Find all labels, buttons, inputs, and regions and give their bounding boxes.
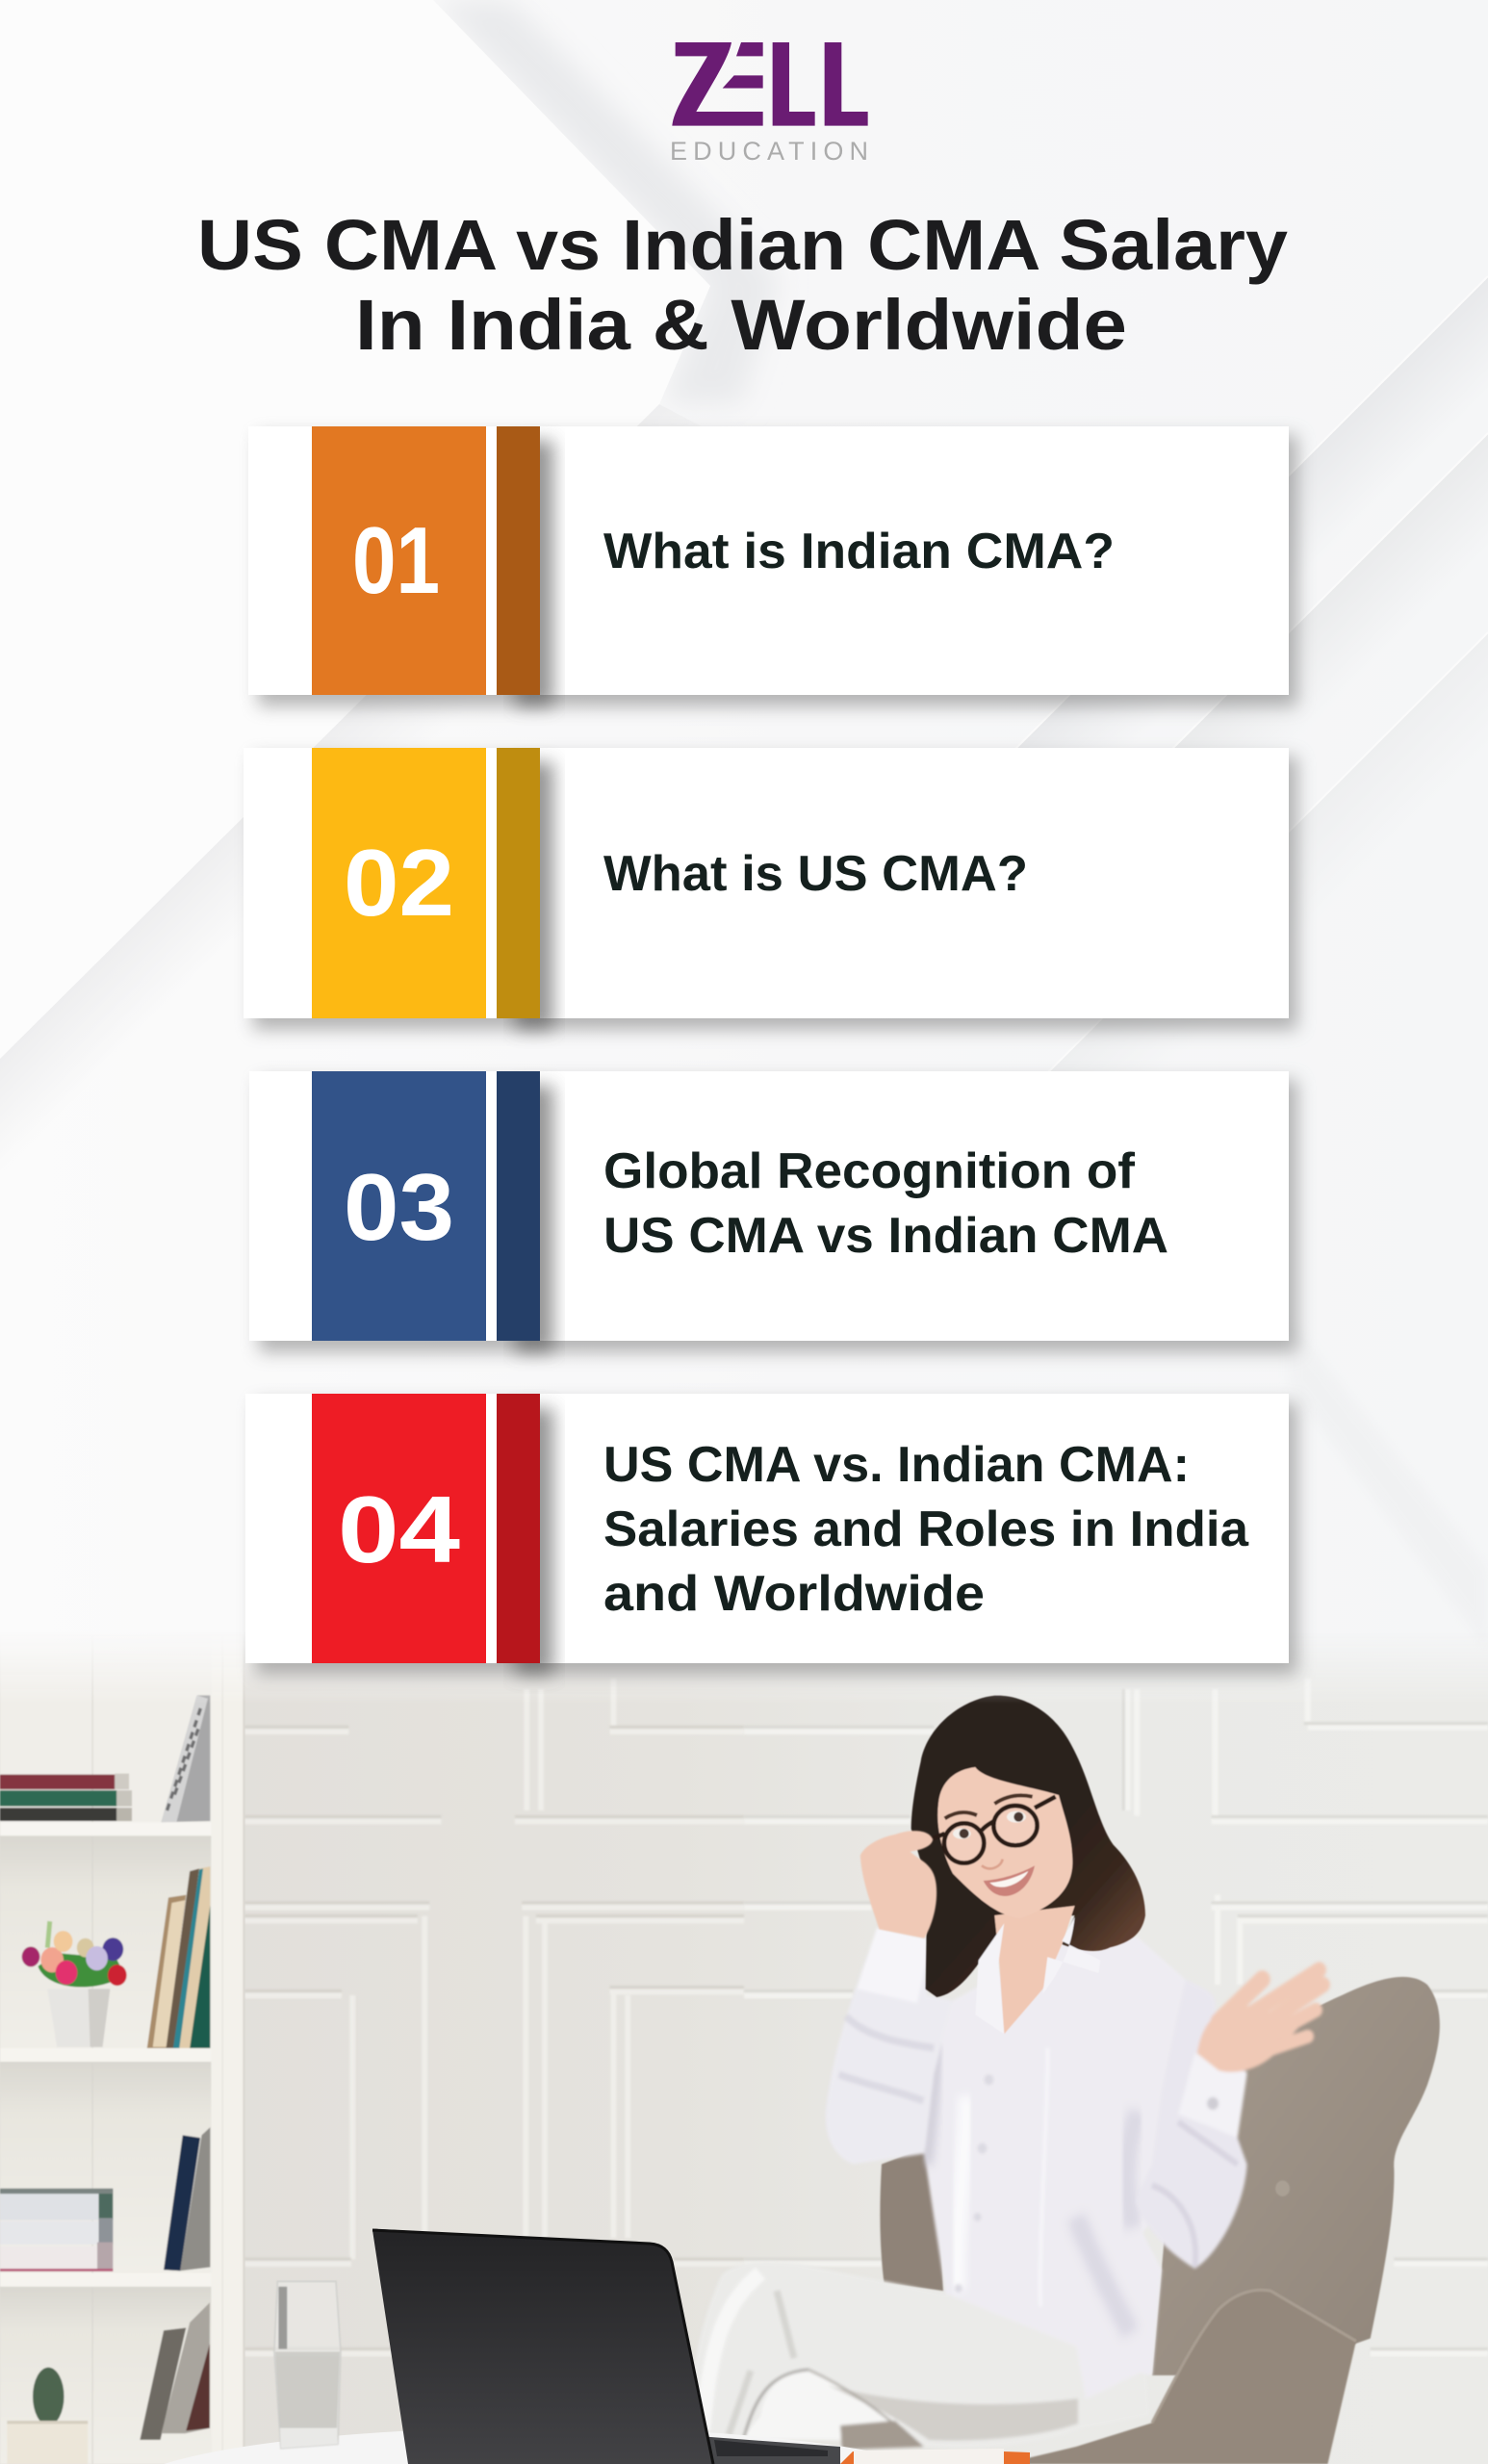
right sleeve (1151, 1989, 1249, 2270)
bookcase (0, 1636, 244, 2464)
planter with cactus (7, 2368, 88, 2464)
face (937, 1767, 1072, 1918)
shirt body (922, 1938, 1184, 2395)
raised hand adjusting glasses (860, 1831, 936, 1938)
right hand (1197, 1970, 1322, 2072)
trousers (695, 2268, 1078, 2451)
nose (982, 1860, 1003, 1868)
number block 04: 04 (338, 1476, 460, 1582)
photo: office scene with woman at laptop (0, 1627, 1488, 2464)
card 02 (244, 748, 1297, 1030)
number block 02: 02 (344, 830, 454, 936)
books: third shelf (0, 2127, 210, 2272)
card 03 (249, 1071, 1297, 1352)
wall with moulding (0, 1627, 1488, 2464)
number block 04 (312, 1394, 540, 1663)
hair (911, 1696, 1145, 1997)
label 03: Global Recognition of (603, 1143, 1136, 1199)
laptop (372, 2229, 840, 2464)
head (911, 1696, 1145, 2034)
label 04: and Worldwide (603, 1566, 985, 1622)
number block 02 (312, 748, 540, 1018)
label 04: Salaries and Roles in India (603, 1502, 1249, 1557)
books: top shelf (0, 1695, 210, 1822)
logo wordmark: EDUCATION (670, 137, 868, 166)
chair back (880, 1977, 1440, 2375)
title: US CMA vs Indian CMA Salary (197, 205, 1288, 285)
label 01: What is Indian CMA? (603, 524, 1115, 579)
card 01 (248, 426, 1297, 706)
smile (984, 1865, 1035, 1896)
logo mark (672, 42, 868, 126)
chair arm (1003, 2290, 1356, 2464)
woman (691, 1928, 1322, 2450)
eyebrows (945, 1795, 1033, 1818)
collar (977, 1917, 1084, 2033)
orange book on table (840, 2449, 1030, 2464)
left sleeve (826, 1928, 953, 2164)
glasses (932, 1797, 1056, 1863)
number block 03: 03 (344, 1154, 454, 1260)
table (165, 2431, 866, 2464)
label 02: What is US CMA? (603, 846, 1028, 902)
label 03: US CMA vs Indian CMA (603, 1208, 1168, 1264)
label 04: US CMA vs. Indian CMA: (603, 1437, 1190, 1493)
title: In India & Worldwide (355, 285, 1127, 365)
eyes (953, 1811, 1026, 1839)
books: bottom shelf (140, 2302, 210, 2440)
number block 03 (312, 1071, 540, 1341)
glass of water (274, 2281, 341, 2449)
logo: Zell Education (670, 42, 868, 166)
flower pot (22, 1921, 127, 2047)
neck (994, 1906, 1075, 2034)
number block 01 (312, 426, 540, 695)
number block 01: 01 (352, 507, 440, 613)
card 04 (245, 1394, 1297, 1675)
books: second shelf (147, 1866, 210, 2048)
